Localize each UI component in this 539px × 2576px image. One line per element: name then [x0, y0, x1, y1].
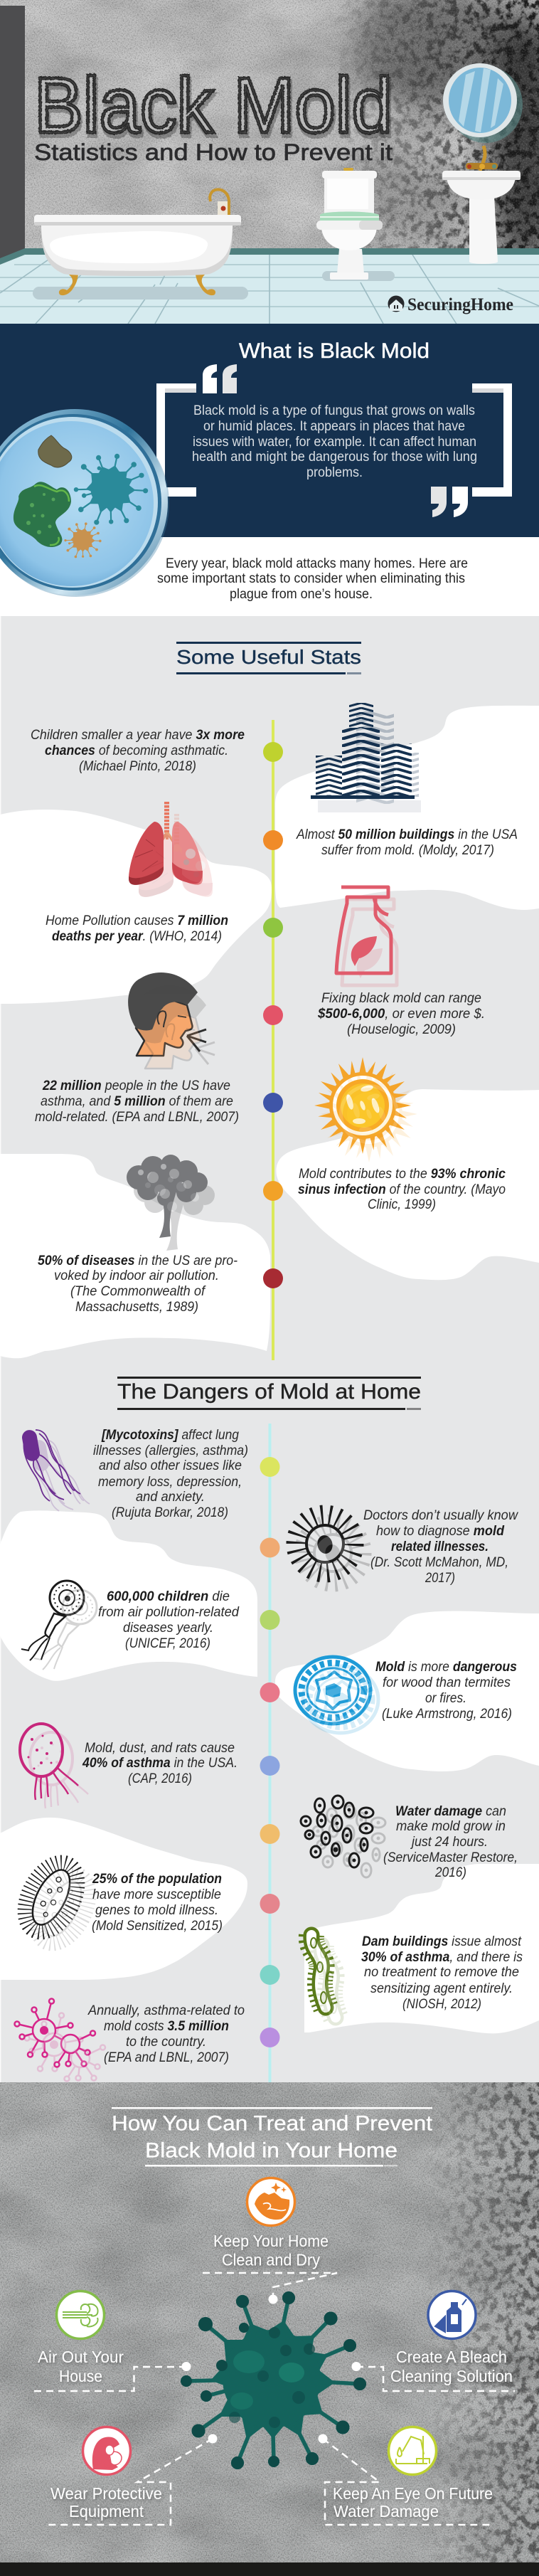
label: keep clean: Keep Your Home [213, 2232, 329, 2250]
panel: stats and dangers background [0, 616, 539, 2082]
label: air out [38, 2348, 124, 2385]
label: air out: House [59, 2367, 102, 2385]
heading: some useful stats [176, 642, 361, 674]
danger: asthma: Mold, dust, and rats cause [85, 1741, 235, 1756]
danger: doctors: related illnesses. [391, 1539, 489, 1554]
white wave: 5 [0, 1510, 257, 1681]
quote frame [156, 383, 512, 497]
panel: treat and prevent [0, 2082, 539, 2576]
stat: diseases [38, 1253, 238, 1315]
orange virus [64, 522, 102, 558]
title: Black Mold [34, 62, 393, 149]
danger: costs: to the country. [126, 2035, 206, 2050]
danger: children: (UNICEF, 2016) [125, 1636, 210, 1651]
icon: orange spore [314, 1057, 417, 1162]
stat: diseases: 50% of diseases in the US are pro- [38, 1253, 238, 1268]
title: Black Mold [34, 62, 393, 149]
subtitle: Statistics and How to Prevent it [34, 139, 393, 165]
danger: population: (Mold Sensitized, 2015) [92, 1919, 223, 1934]
danger: children: diseases yearly. [123, 1621, 213, 1636]
stat: diseases: voked by indoor air pollution. [54, 1268, 219, 1283]
icon: petri dish [0, 409, 169, 597]
stat: diseases: Massachusetts, 1989) [75, 1300, 198, 1315]
stat: cost: (Houselogic, 2009) [347, 1022, 456, 1037]
danger: doctors: Doctors don’t usually know [363, 1508, 518, 1523]
icon: lungs [129, 802, 213, 897]
text block: definition: health and might be dangerous for those with lung [192, 450, 477, 465]
icon: air out [57, 2291, 104, 2339]
icon: spray bottle [336, 887, 397, 985]
heading: the dangers of mold at home: The Dangers of Mold at Home [117, 1380, 421, 1404]
stat: buildings [296, 827, 518, 858]
icon: tadpole cell [21, 1581, 97, 1670]
white wave: 4 [0, 1154, 270, 1358]
icon: pink network cell [14, 1999, 105, 2082]
icon: bleach [428, 2291, 476, 2339]
white wave: 1 [275, 706, 539, 910]
sink [442, 146, 521, 264]
white wave: 3 [276, 1089, 539, 1280]
icon: blue disc [295, 1657, 378, 1733]
text block: definition: issues with water, for example. It can affect human [193, 435, 476, 450]
danger: children [98, 1589, 240, 1651]
danger: population: 25% of the population [92, 1872, 222, 1887]
danger: wood: for wood than termites [383, 1675, 511, 1690]
stat: sinus [298, 1167, 506, 1212]
panel: what is black mold [0, 324, 539, 537]
danger: doctors [363, 1508, 518, 1586]
danger: costs [87, 2003, 245, 2065]
stat: cost: Fixing black mold can range [321, 991, 481, 1006]
label: water damage: Water Damage [333, 2502, 439, 2521]
label: protective equipment [50, 2484, 162, 2521]
icon: pink cell [20, 1724, 88, 1808]
stat: sinus: Clinic, 1999) [368, 1197, 436, 1212]
stat: asthma: 22 million people in the US have [42, 1078, 230, 1093]
mirror [443, 63, 523, 143]
white wave: 2 [0, 810, 272, 1004]
stat: children: (Michael Pinto, 2018) [79, 759, 196, 774]
icon: green bacterium [311, 1935, 336, 2018]
danger: doctors: how to diagnose mold [376, 1524, 504, 1539]
dark door [0, 6, 25, 259]
danger: mycotoxins: and also other issues like [99, 1458, 242, 1473]
heading: the dangers of mold at home [117, 1377, 421, 1410]
icon: hairy bacterium [14, 1853, 100, 1953]
danger: wood [375, 1660, 517, 1722]
icon: coughing man [128, 972, 215, 1069]
icon: closing quote [431, 487, 468, 517]
label: protective equipment: Equipment [69, 2502, 144, 2521]
stat: cost: $500-6,000, or even more $. [317, 1007, 485, 1022]
connector lines [29, 2273, 515, 2525]
stat: children: chances of becoming asthmatic. [45, 743, 228, 758]
stat: diseases: (The Commonwealth of [70, 1284, 206, 1299]
text block: definition: or humid places. It appears in places that have [203, 419, 465, 434]
label: water damage: Keep An Eye On Future [333, 2484, 493, 2503]
icon: smoke [127, 1155, 215, 1251]
timeline: dangers [260, 1424, 280, 2082]
danger: mycotoxins: illnesses (allergies, asthma) [93, 1443, 248, 1458]
label: bleach: Create A Bleach [396, 2348, 507, 2366]
danger: children: 600,000 children die [107, 1589, 230, 1604]
danger: population: genes to mold illness. [95, 1903, 218, 1918]
danger: damp buildings [361, 1934, 523, 2012]
text block: intro: plague from one’s house. [230, 587, 373, 602]
label: water damage [333, 2484, 493, 2521]
white wave: 6 [275, 1611, 539, 1771]
danger: damp buildings: Dam buildings issue almost [362, 1934, 522, 1949]
text block: intro: some important stats to consider when eliminating this [157, 571, 465, 586]
stat: pollution: deaths per year. (WHO, 2014) [52, 929, 222, 944]
text block: intro [157, 556, 468, 602]
danger: mycotoxins: memory loss, depression, [98, 1475, 242, 1490]
stat: pollution: Home Pollution causes 7 million [46, 913, 228, 928]
danger: wood: (Luke Armstrong, 2016) [382, 1707, 512, 1722]
timeline: stats [263, 720, 283, 1360]
danger: mycotoxins: [Mycotoxins] affect lung [101, 1428, 239, 1443]
teal virus [74, 454, 148, 525]
stat: children [31, 728, 245, 774]
danger: mycotoxins: and anxiety. [136, 1490, 205, 1505]
central virus [181, 2291, 366, 2469]
white wave: 7 [0, 1818, 247, 1980]
danger: water damage: just 24 hours. [410, 1835, 488, 1850]
icon: buildings [311, 703, 421, 812]
stat: sinus: Mold contributes to the 93% chronic [299, 1167, 506, 1182]
danger: water damage: make mold grow in [396, 1819, 506, 1834]
heading: some useful stats: Some Useful Stats [176, 646, 361, 668]
danger: costs: (EPA and LBNL, 2007) [104, 2050, 229, 2065]
brown mold [38, 435, 72, 467]
stat: buildings: Almost 50 million buildings in the USA [296, 827, 518, 842]
danger: wood: Mold is more dangerous [375, 1660, 517, 1675]
label: bleach [390, 2348, 513, 2385]
danger: doctors: 2017) [425, 1571, 455, 1586]
icon: purple bacterium [21, 1429, 90, 1511]
heading: Black Mold in Your Home [145, 2138, 397, 2163]
stat: sinus: sinus infection of the country. (Mayo [298, 1182, 506, 1197]
danger: water damage: Water damage can [395, 1804, 506, 1819]
danger: population: have more susceptible [92, 1887, 221, 1902]
logo: SecuringHome: SecuringHome [407, 295, 513, 314]
danger: population [92, 1872, 223, 1934]
text block: definition: Black mold is a type of fungus that grows on walls [193, 403, 475, 418]
stat: children: Children smaller a year have 3x more [31, 728, 245, 743]
stat: asthma: mold-related. (EPA and LBNL, 2007) [35, 1110, 239, 1125]
icon: black spiked cell [296, 1515, 362, 1582]
white wave: 8 [304, 1864, 539, 2033]
icon: protective equipment [82, 2427, 131, 2474]
floor [0, 248, 539, 325]
icon: water damage [388, 2427, 437, 2474]
danger: damp buildings: no treatment to remove the [364, 1965, 519, 1980]
heading: How You Can Treat and Prevent [112, 2111, 433, 2136]
danger: damp buildings: 30% of asthma, and there is [361, 1950, 523, 1965]
stat: asthma [35, 1078, 239, 1125]
heading: What is Black Mold [239, 339, 429, 363]
danger: costs: Annually, asthma-related to [87, 2003, 245, 2018]
danger: water damage [383, 1804, 518, 1880]
danger: costs: mold costs 3.5 million [104, 2019, 229, 2034]
toilet [316, 168, 395, 281]
danger: damp buildings: (NIOSH, 2012) [402, 1997, 481, 2012]
label: protective equipment: Wear Protective [50, 2484, 162, 2503]
label: bleach: Cleaning Solution [390, 2367, 513, 2385]
panel: hero bathroom [0, 0, 539, 325]
title: Black Mold [36, 65, 394, 153]
stat: asthma: asthma, and 5 million of them are [41, 1094, 233, 1109]
danger: asthma: 40% of asthma in the USA. [82, 1756, 238, 1771]
label: keep clean [213, 2232, 329, 2269]
stat: pollution [46, 913, 228, 944]
green mold [14, 482, 71, 547]
danger: wood: or fires. [425, 1691, 466, 1706]
icon: black spores [301, 1796, 385, 1877]
danger: asthma: (CAP, 2016) [128, 1771, 192, 1786]
label: air out: Air Out Your [38, 2348, 124, 2366]
stat: cost [317, 991, 485, 1037]
label: keep clean: Clean and Dry [222, 2251, 320, 2269]
danger: mycotoxins: (Rujuta Borkar, 2018) [112, 1505, 228, 1520]
danger: damp buildings: sensitizing agent entirely. [370, 1981, 513, 1996]
danger: doctors: (Dr. Scott McMahon, MD, [370, 1555, 508, 1570]
text block: definition: problems. [306, 465, 363, 480]
danger: mycotoxins [93, 1428, 248, 1520]
icon: opening quote [203, 364, 237, 393]
danger: water damage: (ServiceMaster Restore, [383, 1850, 518, 1865]
danger: water damage: 2016) [434, 1865, 466, 1880]
icon: keep clean [247, 2178, 294, 2225]
danger: children: from air pollution-related [98, 1605, 240, 1620]
text block: definition [192, 403, 477, 480]
heading [112, 2107, 433, 2167]
stat: buildings: suffer from mold. (Moldy, 2017) [321, 843, 494, 858]
bathtub [33, 189, 248, 300]
text block: intro: Every year, black mold attacks many homes. Here are [166, 556, 468, 571]
danger: asthma [82, 1741, 238, 1786]
